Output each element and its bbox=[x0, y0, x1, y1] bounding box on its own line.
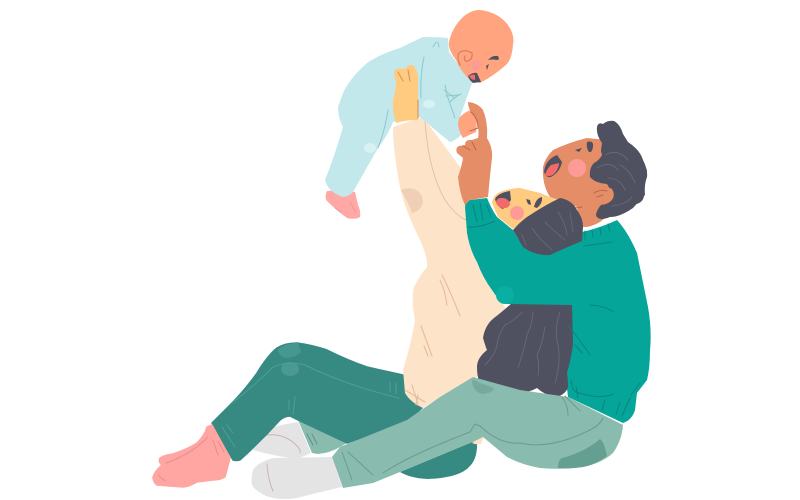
baby: blue onesie bbox=[325, 37, 472, 197]
baby: ear bbox=[458, 51, 472, 65]
baby: hand bbox=[458, 110, 477, 138]
man: sweater cuffs and creases bbox=[468, 203, 640, 416]
woman: hair over man's arm bbox=[513, 198, 583, 255]
baby: mouth bbox=[468, 73, 481, 83]
woman: face bbox=[492, 188, 557, 229]
baby: eyes bbox=[486, 56, 499, 70]
man: sweater arm bbox=[465, 198, 600, 305]
man: cheek bbox=[568, 159, 586, 177]
woman: long hair lower bbox=[477, 303, 573, 397]
woman: cheek bbox=[510, 206, 524, 220]
baby: cheek bbox=[471, 60, 481, 70]
woman: light green jeans bbox=[332, 377, 623, 488]
woman: pink sock bbox=[153, 425, 230, 487]
man: mouth bbox=[544, 155, 562, 177]
baby: foot bbox=[326, 190, 360, 219]
man: eyes bbox=[575, 142, 593, 152]
man: face and neck bbox=[543, 138, 620, 227]
woman: eyes bbox=[526, 197, 542, 208]
man: sweater bbox=[465, 198, 651, 423]
man: hand holding baby bbox=[456, 102, 492, 205]
woman: mouth bbox=[495, 191, 511, 209]
woman: front white sock bbox=[252, 457, 342, 499]
man: curly hair bbox=[590, 121, 647, 219]
woman: back leg bbox=[212, 343, 477, 479]
woman: lower hair strands bbox=[485, 312, 560, 383]
woman: cream sweater torso and raised arm bbox=[393, 117, 507, 444]
baby: head bbox=[449, 10, 513, 83]
woman: raised hand bbox=[393, 65, 418, 123]
